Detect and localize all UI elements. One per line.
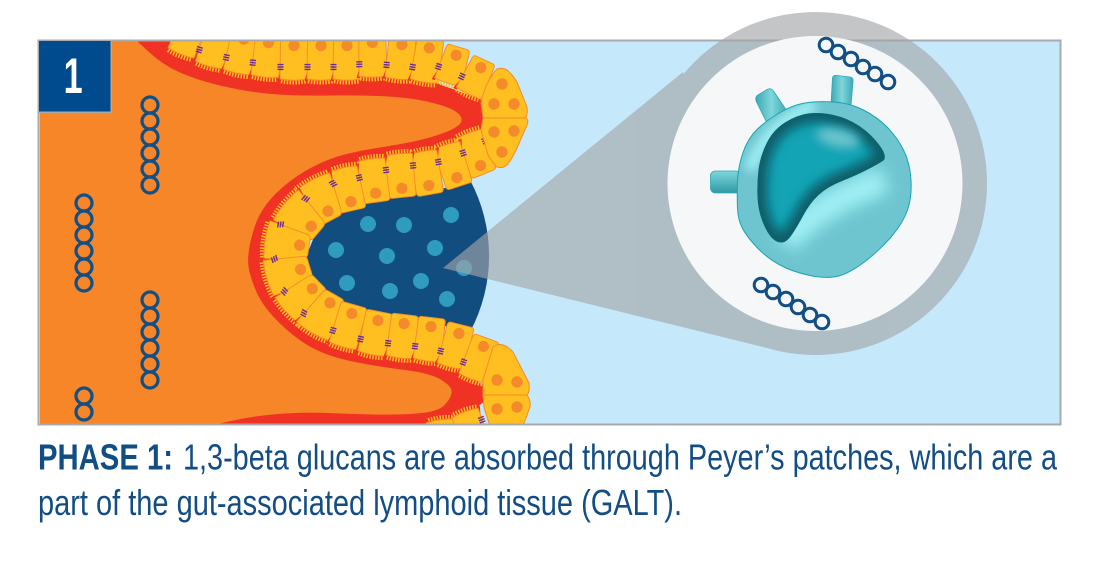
- Peyer's patch: [306, 180, 489, 332]
- number badge: [38, 40, 112, 113]
- cell receptors: [710, 75, 853, 193]
- panel: intestinal wall illustration: [40, 42, 531, 424]
- glucan chain: bottom of lens: [754, 278, 829, 329]
- caption: part of the gut-associated lymphoid tissue (GALT).: [38, 482, 682, 523]
- glucan chains in tissue: [76, 97, 158, 420]
- epithelial cells: [167, 42, 499, 424]
- magnifier lens: [668, 36, 962, 331]
- cell body: [737, 102, 911, 277]
- patch dots: [328, 207, 472, 307]
- villus tip cells: upper: [481, 68, 528, 168]
- red lamina band: [138, 42, 484, 424]
- caption: [38, 436, 1058, 523]
- villus tip cells: lower: [483, 344, 530, 426]
- icon: immune cell: [710, 75, 911, 277]
- frame border: [38, 40, 1060, 424]
- glucan chain: top of lens: [819, 38, 895, 89]
- magnifier cone and ring: [443, 12, 987, 355]
- orange tissue: [40, 41, 462, 424]
- number badge: 1: [64, 48, 83, 104]
- caption: PHASE 1:: [38, 436, 173, 478]
- panel: illustration background: [38, 40, 1061, 425]
- cell nucleus: [757, 113, 885, 242]
